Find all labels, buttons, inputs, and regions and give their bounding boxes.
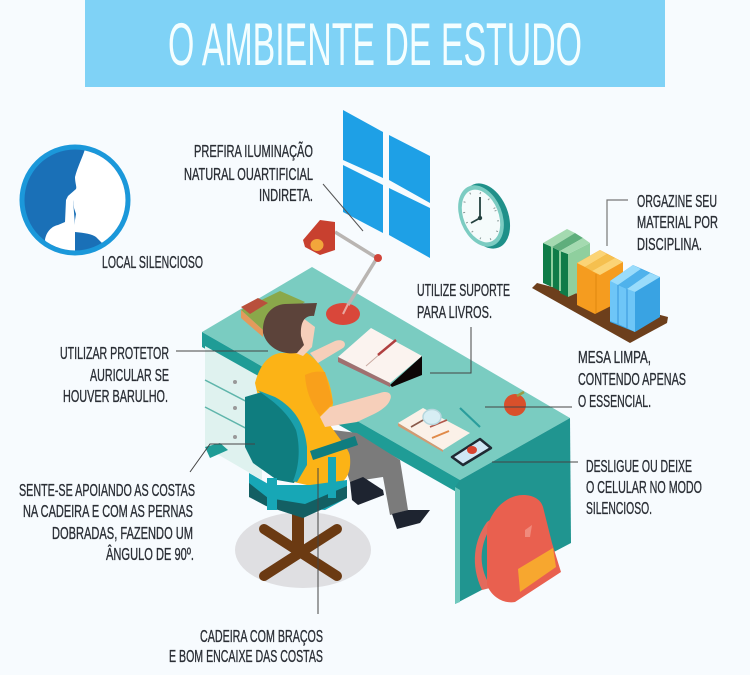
title banner <box>85 0 665 87</box>
leader line: window <box>323 184 363 231</box>
label: iluminação: PREFIRA ILUMINAÇÃO <box>194 140 313 161</box>
label: local silencioso: LOCAL SILENCIOSO <box>102 252 203 272</box>
label: organize <box>637 191 718 254</box>
label: suporte livros: PARA LIVROS. <box>417 302 492 322</box>
label: mesa limpa: MESA LIMPA, <box>578 347 651 367</box>
label: desligue celular <box>586 456 702 518</box>
books on desk <box>241 291 305 337</box>
label: protetor auricular <box>60 343 169 406</box>
leader: sente-se <box>190 444 255 472</box>
label: iluminação <box>184 140 313 205</box>
label: sente-se: NA CADEIRA E COM AS PERNAS <box>23 501 193 521</box>
label: suporte livros <box>417 280 510 322</box>
label: suporte livros: UTILIZE SUPORTE <box>417 280 510 300</box>
label: organize: DISCIPLINA. <box>637 234 702 254</box>
icon: lamp <box>303 220 382 325</box>
label: sente-se: ÂNGULO DE 90º. <box>106 544 194 564</box>
label: cadeira: E BOM ENCAIXE DAS COSTAS <box>169 646 323 666</box>
backpack <box>475 495 561 602</box>
leader: mesa <box>485 406 572 408</box>
label: sente-se: SENTE-SE APOIANDO AS COSTAS <box>19 480 195 500</box>
label: cadeira <box>169 626 323 666</box>
papers and magnifier <box>398 408 470 452</box>
leader: celular <box>492 461 578 463</box>
open book on stand <box>338 328 422 387</box>
icon: window <box>343 110 430 258</box>
icon: bookshelf <box>532 229 668 343</box>
label: iluminação: NATURAL OUARTIFICIAL <box>184 164 313 184</box>
label: mesa limpa <box>578 347 686 411</box>
icon: wall clock <box>450 176 519 256</box>
leader: suporte <box>430 327 471 373</box>
icon: silence profile <box>22 145 135 255</box>
label: iluminação: INDIRETA. <box>259 185 313 205</box>
label: protetor auricular: AURICULAR SE <box>90 365 169 385</box>
apple <box>504 392 526 416</box>
pencil <box>460 408 480 427</box>
label: sente-se <box>19 480 195 564</box>
leader line: bookshelf <box>607 200 628 246</box>
label: sente-se: DOBRADAS, FAZENDO UM <box>52 523 193 543</box>
label: desligue celular: SILENCIOSO. <box>586 498 652 518</box>
label: protetor auricular: UTILIZAR PROTETOR <box>60 343 169 363</box>
label: cadeira: CADEIRA COM BRAÇOS <box>200 626 323 646</box>
person <box>255 303 430 529</box>
phone <box>452 439 491 465</box>
leader: cadeira <box>317 468 319 614</box>
leader: ear protector <box>176 350 268 352</box>
label: mesa limpa: O ESSENCIAL. <box>578 391 651 411</box>
label: mesa limpa: CONTENDO APENAS <box>578 369 686 389</box>
desk <box>202 267 571 604</box>
chair floor shadow <box>235 512 371 588</box>
office chair <box>245 390 358 576</box>
label: protetor auricular: HOUVER BARULHO. <box>63 386 168 406</box>
